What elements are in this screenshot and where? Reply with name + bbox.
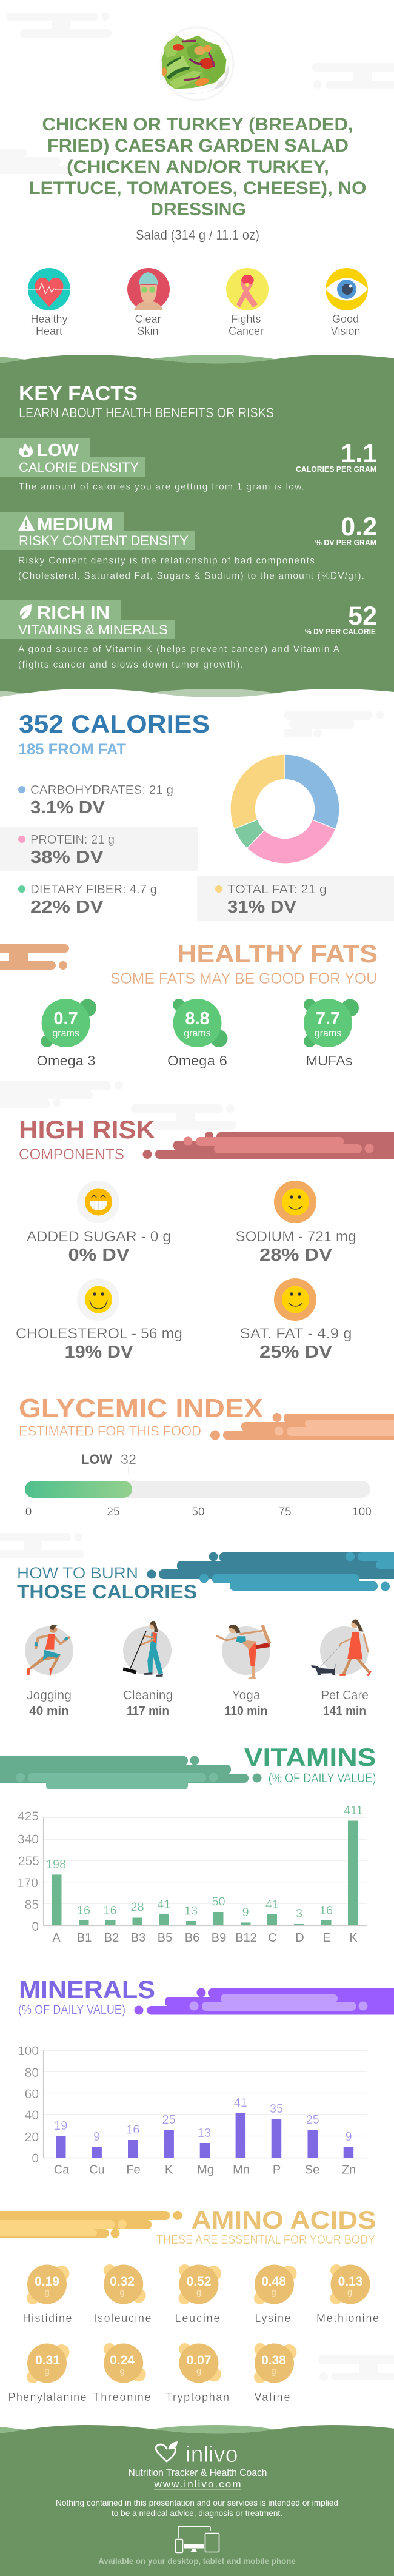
- icon: warning triangle: [18, 515, 35, 531]
- health benefit: clear skin: Clear: [135, 313, 161, 325]
- bar chart: vitamins: B6: [185, 1931, 199, 1945]
- amino acid: threonine: 0.24: [110, 2353, 135, 2367]
- activity: cleaning: [123, 1621, 172, 1677]
- amino acid: leucine: Leucine: [175, 2312, 219, 2324]
- bar chart: minerals: 100: [18, 2044, 39, 2058]
- footer: [0, 2425, 394, 2576]
- fact: rich in vitamins and minerals: 52: [348, 602, 377, 631]
- subtitle: serving size: Salad (314 g / 11.1 oz): [136, 227, 259, 243]
- bar chart: minerals: 25: [306, 2113, 319, 2127]
- bar chart: minerals: 19: [54, 2119, 67, 2133]
- heading: key facts: KEY FACTS: [19, 382, 138, 404]
- bar chart: minerals: Ca: [54, 2164, 70, 2177]
- activity labels: Pet Care: [321, 1689, 369, 1702]
- amino acid: tryptophan: g: [196, 2366, 201, 2376]
- bar chart: vitamins: B9: [212, 1931, 226, 1945]
- amino acid: isoleucine: [93, 2264, 152, 2324]
- fat: mufas: MUFAs: [306, 1053, 353, 1068]
- legend: dietary fiber: [18, 883, 157, 917]
- fat: mufas: [304, 999, 359, 1068]
- fat: omega 3: 0.7: [53, 1009, 78, 1028]
- bar chart: vitamins: B5: [158, 1931, 172, 1945]
- glycemic gauge: 32: [121, 1452, 136, 1467]
- logo: inlivo: [156, 2441, 238, 2467]
- fat: mufas: grams: [315, 1028, 341, 1039]
- fat: omega 6: Omega 6: [167, 1053, 227, 1068]
- glycemic gauge: 0: [25, 1506, 32, 1518]
- heading: high risk: COMPONENTS: [19, 1146, 124, 1163]
- bar chart: vitamins: B3: [131, 1931, 145, 1945]
- bar chart: vitamins: B2: [104, 1931, 119, 1945]
- bar chart: vitamins: 425: [18, 1810, 39, 1823]
- amino acid: lysine: g: [271, 2287, 276, 2298]
- risk item: cholesterol: CHOLESTEROL - 56 mg: [16, 1326, 182, 1342]
- bar chart: minerals: [18, 2044, 367, 2177]
- amino acid: valine: [254, 2343, 297, 2403]
- heading: vitamins: VITAMINS: [244, 1743, 376, 1771]
- fat: omega 3: [36, 999, 96, 1068]
- bar chart: minerals: Cu: [89, 2164, 105, 2177]
- activity labels: [27, 1689, 369, 1718]
- heading: key facts: [19, 382, 274, 420]
- health benefit: fights cancer: Fights: [231, 313, 261, 325]
- bar chart: minerals: Zn: [342, 2164, 356, 2177]
- fact: rich in vitamins and minerals: [0, 600, 377, 670]
- amino acid: valine: Valine: [255, 2391, 290, 2403]
- decoration: high risk bars: [143, 1132, 394, 1159]
- tagline and website: Nutrition Tracker & Health Coach: [129, 2467, 267, 2478]
- disclaimer: Nothing contained in this presentation and our services is intended or implied: [56, 2498, 338, 2507]
- heading: glycemic index: GLYCEMIC INDEX: [19, 1394, 263, 1423]
- bar chart: vitamins: 255: [18, 1854, 39, 1868]
- bar chart: vitamins: 0: [32, 1920, 39, 1934]
- amino acid: methionine: 0.13: [338, 2275, 362, 2289]
- heading: glycemic index: [19, 1394, 263, 1438]
- heading: glycemic index: ESTIMATED FOR THIS FOOD: [19, 1423, 201, 1438]
- heading: key facts: LEARN ABOUT HEALTH BENEFITS OR RISKS: [19, 405, 274, 420]
- health benefit: fights cancer: [226, 268, 269, 337]
- bar chart: vitamins: B1: [77, 1931, 92, 1945]
- heading: vitamins: (% OF DAILY VALUE): [269, 1771, 376, 1785]
- disclaimer: [56, 2498, 338, 2518]
- amino acid: threonine: g: [119, 2366, 125, 2376]
- bar chart: vitamins: 16: [103, 1904, 117, 1917]
- panel: key facts: [0, 355, 394, 697]
- decoration: minerals bars: [135, 1988, 394, 2014]
- glycemic gauge: 50: [192, 1506, 205, 1518]
- heading: minerals: [18, 1975, 155, 2017]
- legend: total fat: [197, 876, 394, 921]
- health benefit: clear skin: Skin: [137, 325, 159, 337]
- bar chart: minerals: Mn: [233, 2164, 250, 2177]
- heading: minerals: (% OF DAILY VALUE): [18, 2003, 125, 2017]
- disclaimer: to be a medical advice, diagnosis or treatment.: [112, 2508, 282, 2518]
- risk item: added sugar: [27, 1181, 171, 1265]
- bar chart: minerals: 16: [126, 2124, 139, 2137]
- fact: rich in vitamins and minerals: (fights cancer and slows down tumor growth).: [18, 660, 243, 670]
- amino acid: leucine: [175, 2264, 221, 2324]
- activity labels: 117 min: [127, 1705, 169, 1718]
- heading: amino acids: THESE ARE ESSENTIAL FOR YOUR BODY: [156, 2233, 375, 2247]
- risk item: added sugar: ADDED SUGAR - 0 g: [27, 1229, 171, 1245]
- amino acid: threonine: [93, 2343, 150, 2403]
- amino acid: methionine: g: [347, 2287, 352, 2298]
- logo: inlivo: inlivo: [185, 2442, 238, 2467]
- heading: amino acids: [156, 2205, 376, 2247]
- amino acid: isoleucine: 0.32: [110, 2275, 135, 2289]
- bar chart: vitamins: 411: [344, 1804, 363, 1817]
- risk item: sodium: [235, 1181, 356, 1265]
- fat: omega 6: grams: [184, 1028, 211, 1039]
- risk item: cholesterol: [16, 1278, 182, 1362]
- decoration: healthy fats bars: [0, 944, 69, 970]
- legend: protein: [0, 827, 198, 871]
- bar chart: vitamins: 9: [242, 1906, 249, 1919]
- health benefit: clear skin: [127, 268, 170, 337]
- bar chart: minerals: K: [165, 2164, 173, 2177]
- heading: vitamins: [244, 1743, 376, 1785]
- heading: high risk: HIGH RISK: [19, 1115, 155, 1144]
- health benefit: good vision: [326, 268, 368, 337]
- bar chart: vitamins: 170: [17, 1876, 38, 1890]
- amino acid: threonine: Threonine: [93, 2391, 150, 2403]
- fact: rich in vitamins and minerals: RICH IN: [37, 603, 110, 623]
- risk item: saturated fat: SAT. FAT - 4.9 g: [240, 1326, 352, 1342]
- amino acid: methionine: [316, 2264, 379, 2324]
- amino acid: phenylalanine: 0.31: [35, 2353, 60, 2367]
- fat: omega 6: [167, 999, 228, 1068]
- bar chart: vitamins: 13: [184, 1904, 198, 1917]
- glycemic gauge: LOW: [81, 1452, 112, 1467]
- risk item: saturated fat: 25% DV: [259, 1343, 333, 1362]
- decoration: burn calories bars: [147, 1552, 394, 1591]
- risk item: cholesterol: 19% DV: [64, 1343, 133, 1362]
- fat: omega 3: Omega 3: [36, 1053, 96, 1068]
- legend: carbohydrates: [18, 783, 173, 817]
- amino acid: leucine: 0.52: [187, 2275, 211, 2289]
- bar chart: vitamins: [17, 1804, 367, 1945]
- health benefit: healthy heart: [28, 268, 70, 337]
- fat: omega 3: grams: [52, 1028, 79, 1039]
- legend: dietary fiber: DIETARY FIBER: 4.7 g: [30, 883, 157, 896]
- fact: rich in vitamins and minerals: VITAMINS & MINERALS: [18, 622, 168, 637]
- bar chart: minerals: P: [273, 2164, 281, 2177]
- bar chart: vitamins: 3: [296, 1907, 302, 1920]
- fact: low calorie density: LOW: [37, 441, 79, 460]
- bar chart: vitamins: E: [322, 1931, 331, 1945]
- fact: low calorie density: 1.1: [341, 439, 377, 468]
- bar chart: vitamins: 50: [212, 1896, 225, 1909]
- activity labels: Cleaning: [123, 1689, 173, 1702]
- amino acid: methionine: Methionine: [316, 2312, 379, 2324]
- decoration: glycemic bars: [210, 1413, 394, 1440]
- legend: protein: PROTEIN: 21 g: [30, 833, 115, 847]
- donut chart: macronutrient split: [230, 754, 339, 864]
- icon: flame: [19, 443, 33, 457]
- heading: amino acids: AMINO ACIDS: [192, 2205, 376, 2234]
- bar chart: minerals: 35: [270, 2102, 283, 2116]
- bar chart: minerals: 60: [25, 2087, 39, 2101]
- call to action: availability: Available on your desktop, tablet and mobile phone: [98, 2556, 296, 2566]
- amino acid: histidine: g: [44, 2287, 50, 2298]
- amino acid: tryptophan: Tryptophan: [165, 2391, 229, 2403]
- title: LETTUCE, TOMATOES, CHEESE), NO: [29, 178, 366, 198]
- activity labels: 110 min: [224, 1705, 268, 1718]
- title: CHICKEN OR TURKEY (BREADED,: [42, 115, 353, 135]
- heading: calories: 352 CALORIES: [19, 709, 210, 738]
- bar chart: minerals: Se: [305, 2164, 319, 2177]
- title: (CHICKEN AND/OR TURKEY,: [67, 157, 329, 177]
- health benefit: good vision: Vision: [331, 325, 360, 337]
- glycemic gauge: [25, 1452, 372, 1518]
- fact: rich in vitamins and minerals: A good source of Vitamin K (helps prevent cancer) and Vitamin A: [18, 644, 340, 655]
- activity labels: 141 min: [323, 1705, 366, 1718]
- heading: healthy fats: HEALTHY FATS: [177, 939, 378, 968]
- icon: devices: [176, 2526, 219, 2553]
- amino acid: valine: g: [271, 2366, 276, 2376]
- heading: healthy fats: SOME FATS MAY BE GOOD FOR YOU: [110, 970, 377, 987]
- activity: jogging: [25, 1625, 73, 1676]
- fact: low calorie density: The amount of calories you are getting from 1 gram is low.: [19, 481, 304, 492]
- fact: medium risky content density: 0.2: [341, 512, 377, 542]
- heading: calories: 185 FROM FAT: [18, 741, 126, 758]
- bar chart: minerals: 20: [25, 2130, 39, 2144]
- glycemic gauge: 25: [107, 1506, 120, 1518]
- amino acid: isoleucine: g: [119, 2287, 125, 2298]
- decoration: amino acids bars: [0, 2211, 182, 2238]
- bar chart: vitamins: 198: [46, 1858, 66, 1871]
- bar chart: minerals: 9: [345, 2130, 352, 2144]
- icon: leaf: [20, 604, 32, 619]
- activity labels: Yoga: [232, 1689, 261, 1702]
- activity: pet care: [311, 1620, 372, 1676]
- amino acid: phenylalanine: g: [44, 2366, 50, 2376]
- bar chart: minerals: 0: [32, 2152, 39, 2165]
- bar chart: minerals: 40: [25, 2108, 39, 2122]
- bar chart: vitamins: 340: [18, 1833, 39, 1846]
- amino acid: histidine: [23, 2264, 72, 2324]
- bar chart: minerals: 9: [93, 2130, 100, 2144]
- health benefit: good vision: Good: [332, 313, 359, 325]
- fact: low calorie density: CALORIE DENSITY: [19, 460, 139, 475]
- bar chart: vitamins: 16: [319, 1904, 333, 1917]
- fact: medium risky content density: MEDIUM: [37, 515, 113, 534]
- fact: rich in vitamins and minerals: % DV PER CALORIE: [305, 627, 376, 636]
- activity: yoga: [216, 1625, 270, 1679]
- heading: how to burn those calories: THOSE CALORIES: [17, 1581, 197, 1603]
- amino acid: isoleucine: Isoleucine: [93, 2312, 152, 2324]
- food photo: salad bowl: [160, 27, 234, 101]
- heading: healthy fats: [110, 939, 378, 987]
- bar chart: vitamins: B12: [235, 1931, 257, 1945]
- amino acid: lysine: [254, 2264, 297, 2324]
- amino acid: histidine: Histidine: [23, 2312, 72, 2324]
- heading: minerals: MINERALS: [19, 1975, 155, 2004]
- legend: total fat: 31% DV: [227, 897, 297, 917]
- bar chart: minerals: 41: [234, 2096, 247, 2110]
- bar chart: minerals: 80: [25, 2066, 39, 2080]
- amino acid: leucine: g: [196, 2287, 201, 2298]
- title: [29, 115, 366, 220]
- bar chart: minerals: 25: [162, 2113, 176, 2127]
- risk item: sodium: SODIUM - 721 mg: [235, 1229, 356, 1245]
- risk item: added sugar: 0% DV: [68, 1246, 130, 1265]
- health benefit: healthy heart: Heart: [36, 325, 62, 337]
- health benefit: fights cancer: Cancer: [229, 325, 264, 337]
- bar chart: vitamins: 16: [77, 1904, 90, 1917]
- heading: high risk: [19, 1115, 155, 1163]
- fact: medium risky content density: [0, 512, 377, 581]
- amino acid: tryptophan: [165, 2343, 229, 2403]
- bar chart: vitamins: 41: [265, 1898, 279, 1911]
- legend: carbohydrates: 3.1% DV: [30, 798, 105, 817]
- glycemic gauge: 75: [278, 1506, 292, 1518]
- bar chart: minerals: Fe: [126, 2164, 141, 2177]
- bar chart: minerals: Mg: [197, 2164, 214, 2177]
- bar chart: vitamins: C: [268, 1931, 277, 1945]
- fact: medium risky content density: (Cholesterol, Saturated Fat, Sugars & Sodium) to the amount (%DV/gr).: [18, 571, 364, 581]
- amino acid: tryptophan: 0.07: [187, 2353, 211, 2367]
- bar chart: vitamins: K: [349, 1931, 358, 1945]
- glycemic gauge: 100: [352, 1506, 372, 1518]
- fact: medium risky content density: Risky Content density is the relationship of bad components: [18, 555, 315, 566]
- bar chart: vitamins: D: [295, 1931, 304, 1945]
- legend: total fat: TOTAL FAT: 21 g: [227, 883, 327, 896]
- bar chart: vitamins: 41: [157, 1898, 171, 1911]
- amino acid: lysine: Lysine: [255, 2312, 291, 2324]
- risk item: sodium: 28% DV: [259, 1246, 333, 1265]
- heading: calories: [18, 709, 210, 758]
- bar chart: vitamins: 28: [130, 1900, 144, 1914]
- activity labels: Jogging: [27, 1689, 72, 1702]
- fact: low calorie density: [0, 438, 377, 492]
- legend: carbohydrates: CARBOHYDRATES: 21 g: [30, 783, 173, 797]
- amino acid: lysine: 0.48: [261, 2275, 286, 2289]
- bar chart: vitamins: A: [52, 1931, 61, 1945]
- title: FRIED) CAESAR GARDEN SALAD: [47, 136, 349, 156]
- bar chart: minerals: 13: [198, 2127, 211, 2140]
- decoration: vitamins bars: [0, 1756, 262, 1789]
- amino acid: phenylalanine: Phenylalanine: [8, 2391, 86, 2403]
- amino acid: phenylalanine: [8, 2343, 86, 2403]
- legend: protein: 38% DV: [30, 848, 104, 867]
- amino acid: valine: 0.38: [261, 2353, 286, 2367]
- health benefit: healthy heart: Healthy: [30, 313, 68, 325]
- activity labels: 40 min: [29, 1705, 69, 1718]
- fact: low calorie density: CALORIES PER GRAM: [296, 465, 376, 474]
- risk item: saturated fat: [240, 1278, 352, 1362]
- amino acid: histidine: 0.19: [35, 2275, 59, 2289]
- fat: omega 6: 8.8: [185, 1009, 210, 1028]
- heading: how to burn those calories: HOW TO BURN: [17, 1564, 138, 1582]
- fact: medium risky content density: % DV PER GRAM: [315, 538, 376, 547]
- heading: how to burn those calories: [17, 1564, 197, 1603]
- legend: dietary fiber: 22% DV: [30, 897, 104, 917]
- fact: medium risky content density: RISKY CONTENT DENSITY: [19, 533, 189, 548]
- title: DRESSING: [150, 200, 246, 220]
- fat: mufas: 7.7: [316, 1009, 340, 1028]
- tagline and website: [129, 2467, 267, 2490]
- tagline and website: www.inlivo.com: [154, 2478, 241, 2490]
- bar chart: vitamins: 85: [25, 1898, 39, 1912]
